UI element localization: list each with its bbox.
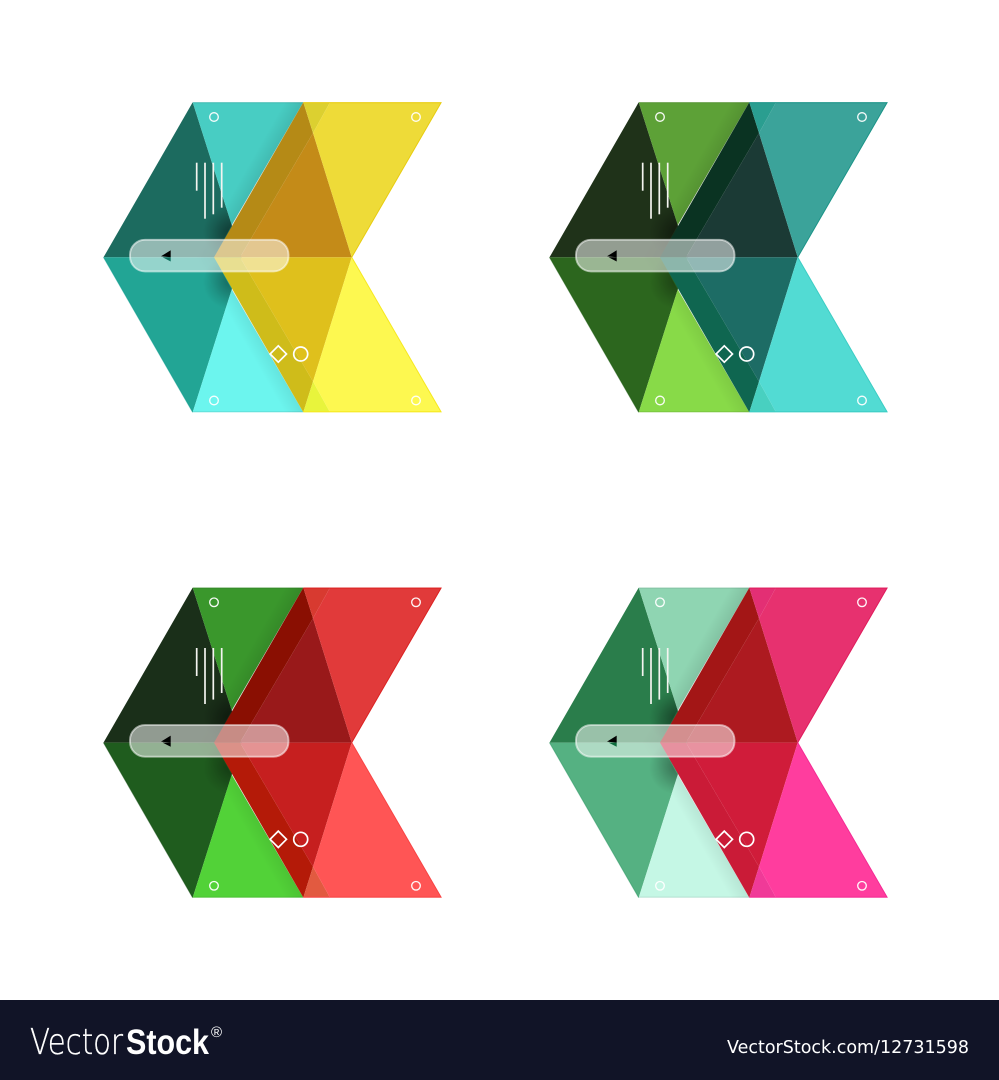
corner markers bbox=[210, 113, 420, 405]
arrow graphic: teal and yellow bbox=[104, 102, 442, 412]
translucent pill label with arrow bbox=[576, 240, 734, 271]
translucent pill label with arrow bbox=[130, 725, 288, 757]
arrow graphic: green and teal bbox=[550, 102, 888, 412]
text placeholder lines bbox=[197, 648, 222, 704]
right chevron: yellow bbox=[214, 102, 442, 412]
footer logo: VectorStock: Stock bbox=[126, 1022, 209, 1062]
footer logo: VectorStock: ® bbox=[211, 1024, 222, 1041]
icons: diamond and circle bbox=[270, 831, 308, 848]
right chevron: teal bbox=[660, 102, 888, 412]
left chevron: green bbox=[550, 102, 749, 412]
left chevron: teal bbox=[104, 102, 303, 412]
icons: diamond and circle bbox=[270, 346, 308, 362]
footer bar bbox=[0, 1000, 999, 1080]
text placeholder lines bbox=[197, 163, 222, 219]
text placeholder lines bbox=[643, 648, 668, 704]
left chevron: mint green bbox=[550, 588, 749, 898]
icons: diamond and circle bbox=[716, 346, 754, 362]
translucent pill label with arrow bbox=[576, 725, 734, 757]
right chevron: red bbox=[214, 588, 442, 898]
corner markers bbox=[210, 598, 420, 890]
footer logo: VectorStock: Vector bbox=[30, 1022, 123, 1063]
icons: diamond and circle bbox=[716, 831, 754, 848]
translucent pill label with arrow bbox=[130, 240, 288, 271]
footer logo: VectorStock bbox=[30, 1022, 222, 1063]
footer image id: VectorStock.com/12731598 bbox=[727, 1037, 969, 1058]
arrow graphic: mint and pink bbox=[550, 588, 888, 898]
text placeholder lines bbox=[643, 163, 668, 219]
left chevron: green bbox=[104, 588, 303, 898]
right chevron: pink bbox=[660, 588, 888, 898]
corner markers bbox=[656, 113, 866, 405]
corner markers bbox=[656, 598, 866, 890]
arrow graphic: green and red bbox=[104, 588, 442, 898]
